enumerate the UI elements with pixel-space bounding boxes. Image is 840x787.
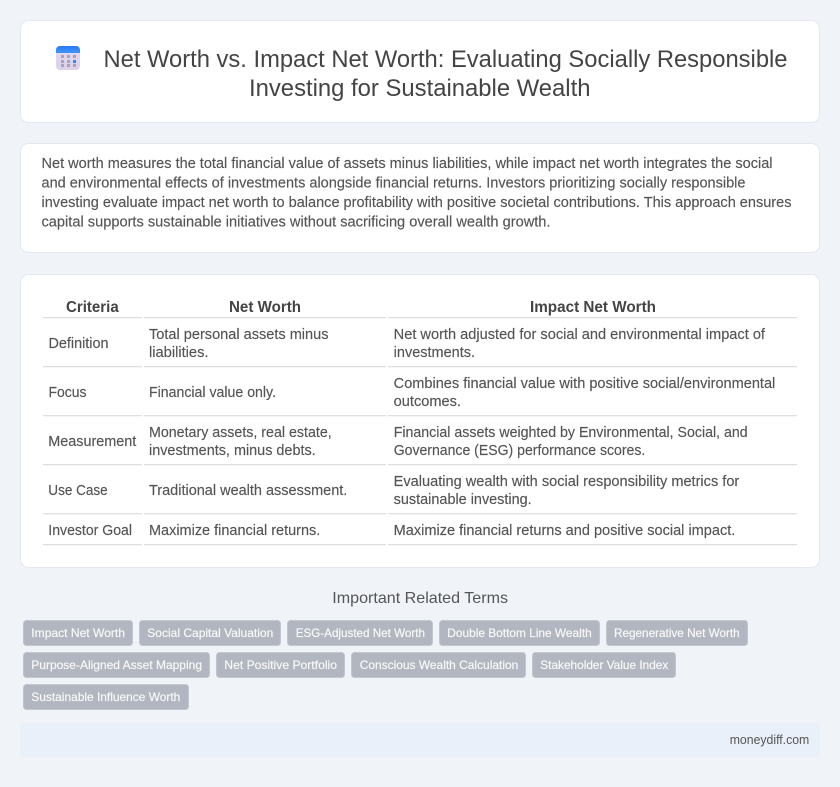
text block: description: Net worth measures the total financial value of assets minus liabilities, while impact net worth integrates the social xyxy=(42,156,772,172)
row: focus: Financial value only. xyxy=(149,385,276,401)
tag: Double Bottom Line Wealth xyxy=(447,626,592,640)
row: use case: Evaluating wealth with social responsibility metrics for xyxy=(394,474,739,490)
row: investor goal xyxy=(48,523,735,539)
row: investor goal: Maximize financial returns and positive social impact. xyxy=(394,523,735,539)
row: measurement: Monetary assets, real estate, xyxy=(149,425,332,441)
text block: description: and environmental effects of investments alongside financial returns. Investors prioritizing socially responsible xyxy=(42,176,746,192)
row: measurement xyxy=(48,425,748,459)
row: definition xyxy=(48,327,766,361)
tag: Purpose-Aligned Asset Mapping xyxy=(31,658,202,672)
row: definition: Definition xyxy=(48,336,108,352)
row: focus xyxy=(48,376,775,410)
icon: calendar xyxy=(56,46,80,70)
panel: description xyxy=(20,144,820,252)
tag: Sustainable Influence Worth xyxy=(31,690,180,704)
row: use case: sustainable investing. xyxy=(394,492,532,508)
text block: description: investing evaluate impact net worth to balance profitability with positive societal contributions. This approach ensures xyxy=(42,195,792,211)
row: use case: Use Case xyxy=(48,483,108,499)
tag xyxy=(24,620,132,646)
text block: description: capital supports sustainable initiatives without sacrificing overall wealth growth. xyxy=(42,214,550,230)
title xyxy=(104,46,788,102)
tag: Social Capital Valuation xyxy=(147,626,273,640)
row: measurement: Governance (ESG) performance scores. xyxy=(394,443,645,459)
tag xyxy=(24,684,188,710)
row: use case xyxy=(48,474,739,508)
tag xyxy=(352,652,526,678)
tag: Stakeholder Value Index xyxy=(540,658,668,672)
row: measurement: Financial assets weighted by Environmental, Social, and xyxy=(394,425,748,441)
text block: description xyxy=(42,156,792,230)
tag: ESG-Adjusted Net Worth xyxy=(296,626,425,640)
row: investor goal: Investor Goal xyxy=(48,523,132,539)
panel: header xyxy=(20,20,820,122)
row: definition: investments. xyxy=(394,345,475,361)
row: definition: liabilities. xyxy=(149,345,208,361)
tag xyxy=(440,620,600,646)
table header: Criteria xyxy=(66,299,119,316)
tag xyxy=(140,620,280,646)
tag xyxy=(532,652,676,678)
row: definition: Total personal assets minus xyxy=(149,327,328,343)
heading: important related terms: Important Related Terms xyxy=(332,590,508,607)
row: investor goal: Maximize financial returns. xyxy=(149,523,320,539)
footer: moneydiff.com xyxy=(730,732,809,747)
table header xyxy=(66,299,656,316)
row: definition: Net worth adjusted for social and environmental impact of xyxy=(394,327,766,343)
panel: comparison table xyxy=(20,274,820,568)
tag xyxy=(288,620,432,646)
row: focus: Combines financial value with positive social/environmental xyxy=(394,376,775,392)
table header: Net Worth xyxy=(229,299,301,316)
row: focus: outcomes. xyxy=(394,394,461,410)
row: measurement: investments, minus debts. xyxy=(149,443,316,459)
tag xyxy=(606,620,748,646)
title: Net Worth vs. Impact Net Worth: Evaluating Socially Responsible xyxy=(104,46,788,73)
row: use case: Traditional wealth assessment. xyxy=(149,483,347,499)
title: Investing for Sustainable Wealth xyxy=(249,75,590,102)
tag: Conscious Wealth Calculation xyxy=(360,658,518,672)
table header: Impact Net Worth xyxy=(530,299,656,316)
tag: Impact Net Worth xyxy=(31,626,125,640)
tags: related terms xyxy=(24,620,748,710)
tag xyxy=(216,652,344,678)
tag: Regenerative Net Worth xyxy=(614,626,740,640)
footer xyxy=(20,723,820,757)
tag xyxy=(24,652,210,678)
row: measurement: Measurement xyxy=(48,434,136,450)
tag: Net Positive Portfolio xyxy=(224,658,337,672)
row: focus: Focus xyxy=(48,385,86,401)
